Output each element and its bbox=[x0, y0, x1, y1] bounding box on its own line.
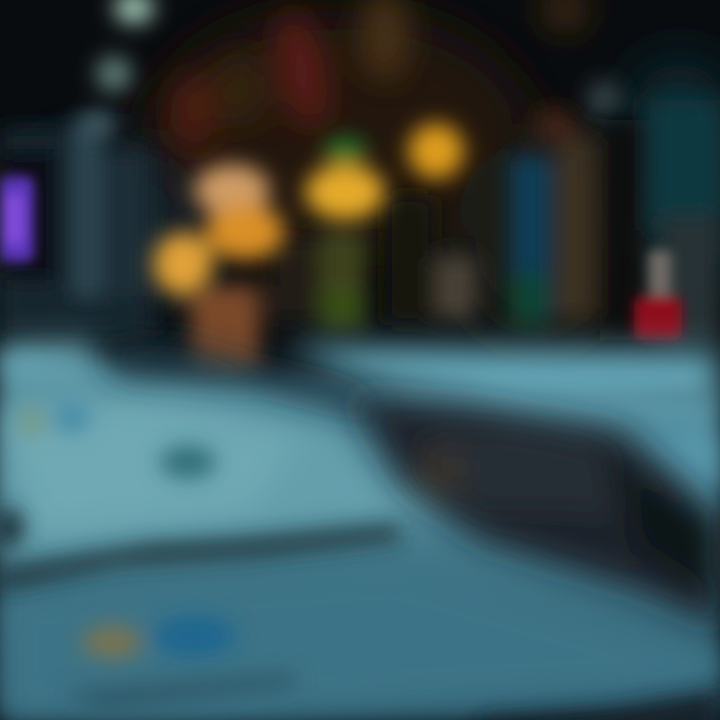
monitor: left screen and tower bbox=[0, 120, 150, 336]
icon: purple screen glow bbox=[0, 176, 34, 262]
background objects: red and amber streaks bbox=[170, 0, 589, 152]
center stems: amber and green bottles bbox=[190, 230, 366, 380]
bokeh lights: orange and yellow bbox=[153, 123, 464, 296]
red object: bottom right bottle bbox=[634, 250, 682, 340]
paper marks: teal and amber spots bbox=[20, 404, 216, 478]
desk surface: blue paper bbox=[0, 350, 720, 720]
pen: large dark diagonal shape bbox=[350, 395, 720, 625]
dark stroke: across paper bbox=[0, 508, 400, 590]
paper sheets: upper highlights bbox=[0, 343, 720, 720]
top bokeh: pale lights bbox=[80, 0, 622, 136]
chart marks: amber and blue bars bbox=[82, 616, 236, 658]
lower line: faint dark band bbox=[60, 672, 300, 712]
background glow: warm shelves bbox=[0, 10, 720, 340]
shadow: between shelf and desk bbox=[105, 345, 400, 420]
bottom edge: dark corner bbox=[480, 690, 720, 720]
right side objects: bottles and books bbox=[385, 100, 720, 345]
